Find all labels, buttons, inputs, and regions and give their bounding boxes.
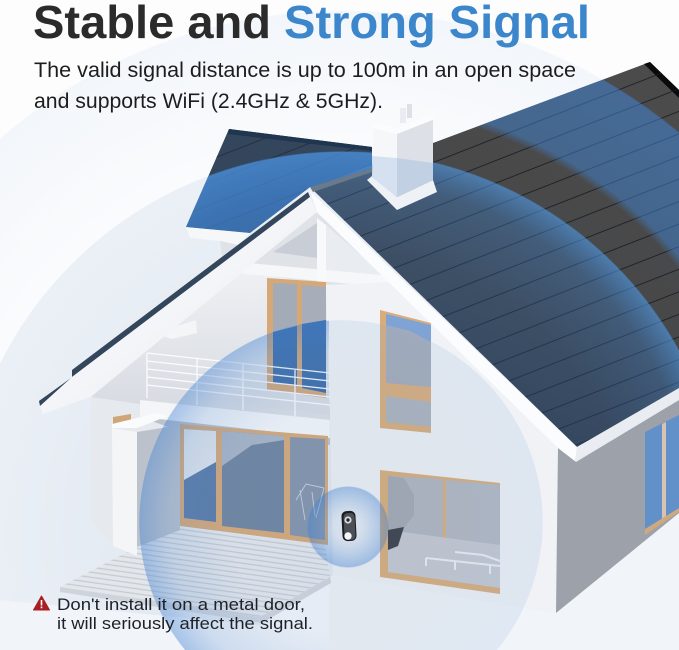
upper right window	[380, 310, 431, 433]
icon: warning triangle	[34, 596, 50, 610]
lower right window	[380, 470, 500, 594]
balcony door	[267, 278, 326, 398]
roof signal tint	[312, 80, 679, 447]
back roof signal tint	[186, 151, 372, 233]
ground floor windows	[180, 424, 328, 545]
main roof	[310, 62, 679, 447]
left roof strip	[39, 192, 310, 406]
upper left wall	[91, 272, 330, 422]
right side wall	[556, 400, 679, 613]
balcony railing and slab	[140, 353, 330, 445]
small side window	[113, 414, 131, 426]
doorbell signal circle	[307, 486, 389, 568]
inner signal circle, right part	[329, 320, 543, 650]
gable interior	[237, 212, 392, 288]
chimney	[367, 104, 437, 210]
front wall	[326, 282, 558, 613]
warning text: it will seriously affect the signal.	[57, 614, 313, 633]
terrace floor	[60, 527, 331, 623]
inner signal circle, left part	[139, 320, 329, 650]
roof fascia	[40, 168, 679, 461]
lower left wall	[91, 397, 180, 545]
wall mounted unit	[165, 320, 197, 339]
description text	[34, 59, 576, 113]
lower ground shade	[0, 513, 679, 650]
warning text	[57, 595, 313, 633]
warning text: Don't install it on a metal door,	[57, 595, 305, 614]
back roof	[186, 129, 372, 257]
warning note	[34, 595, 313, 633]
column	[112, 413, 180, 556]
icon: doorbell	[341, 511, 357, 541]
description text: and supports WiFi (2.4GHz & 5GHz).	[34, 90, 383, 113]
middle signal circle	[0, 151, 679, 650]
description text: The valid signal distance is up to 100m in an open space	[34, 59, 576, 82]
